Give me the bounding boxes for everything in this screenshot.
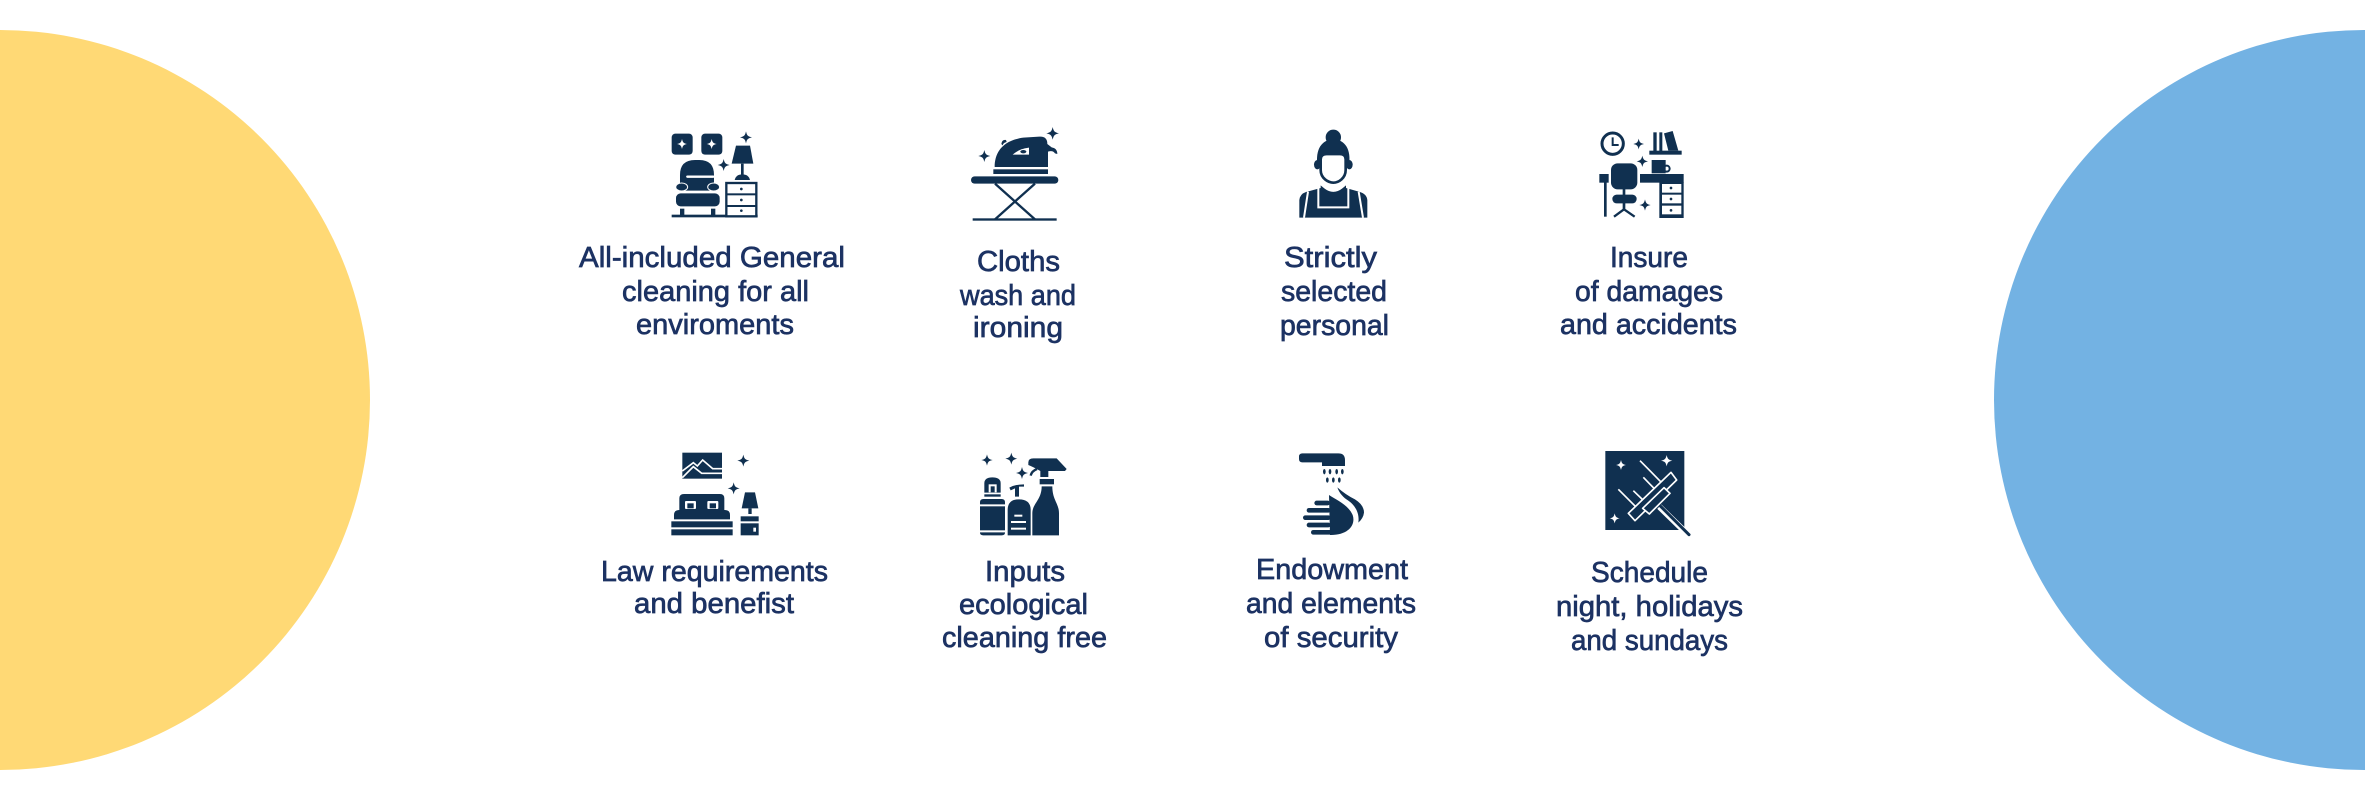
label: endowment and elements of security: Endowment: [1256, 554, 1408, 586]
label: insure of damages and accidents: Insure: [1610, 242, 1688, 274]
panel: strictly selected personal: [1280, 130, 1389, 342]
panel: inputs ecological: [942, 453, 1107, 654]
panel: law requirements: [601, 453, 828, 620]
label: inputs ecological cleaning free: ecological: [959, 589, 1088, 621]
panel: endowment and security: [1246, 453, 1416, 654]
label: inputs ecological cleaning free: Inputs: [985, 556, 1065, 588]
panel: schedule: [1556, 451, 1743, 657]
panel: insure of damages: [1560, 131, 1737, 341]
label: all-included general cleaning: enviroments: [636, 309, 794, 341]
label: cloths wash and ironing: [959, 246, 1076, 344]
label: insure of damages and accidents: of damages: [1575, 276, 1723, 308]
panel: general cleaning: [579, 131, 845, 341]
label: strictly selected personal: personal: [1280, 310, 1389, 342]
icon: squeegee on window: [1605, 451, 1689, 535]
label: all-included general cleaning: [579, 242, 845, 341]
panel: cloths wash and ironing: [959, 127, 1076, 344]
label: schedule night, holidays and sundays: and sundays: [1571, 625, 1728, 657]
label: law requirements and benefist: [601, 556, 828, 620]
label: schedule night, holidays and sundays: night, holidays: [1556, 591, 1743, 623]
icon: office desk and chair: [1599, 131, 1684, 218]
label: strictly selected personal: Strictly: [1284, 242, 1378, 274]
label: schedule night, holidays and sundays: Schedule: [1591, 557, 1708, 589]
label: insure of damages and accidents: [1560, 242, 1737, 341]
icon: bedroom: [671, 453, 759, 535]
decorative blue circle right: [1994, 30, 2365, 770]
label: strictly selected personal: [1280, 242, 1389, 342]
label: law requirements and benefist: Law requirements: [601, 556, 828, 588]
icon: cleaning product bottles: [980, 453, 1067, 535]
label: cloths wash and ironing: wash and: [959, 280, 1076, 312]
icon: living room furniture: [672, 131, 758, 217]
label: cloths wash and ironing: ironing: [973, 312, 1063, 344]
decorative yellow circle left: [0, 30, 370, 770]
label: law requirements and benefist: and benefist: [634, 588, 794, 620]
label: schedule night, holidays and sundays: [1556, 557, 1743, 657]
icon: iron on ironing board: [971, 127, 1059, 221]
label: insure of damages and accidents: and accidents: [1560, 309, 1737, 341]
label: strictly selected personal: selected: [1281, 276, 1387, 308]
label: endowment and elements of security: of security: [1264, 622, 1398, 654]
label: inputs ecological cleaning free: cleaning free: [942, 622, 1107, 654]
label: all-included general cleaning: All-included General: [579, 242, 845, 274]
label: inputs ecological cleaning free: [942, 556, 1107, 654]
icon: hand washing under faucet: [1299, 453, 1364, 535]
label: cloths wash and ironing: Cloths: [977, 246, 1060, 278]
label: endowment and elements of security: and elements: [1246, 588, 1416, 620]
icon: cleaning person with apron: [1299, 130, 1367, 218]
label: endowment and elements of security: [1246, 554, 1416, 654]
label: all-included general cleaning: cleaning for all: [622, 276, 809, 308]
